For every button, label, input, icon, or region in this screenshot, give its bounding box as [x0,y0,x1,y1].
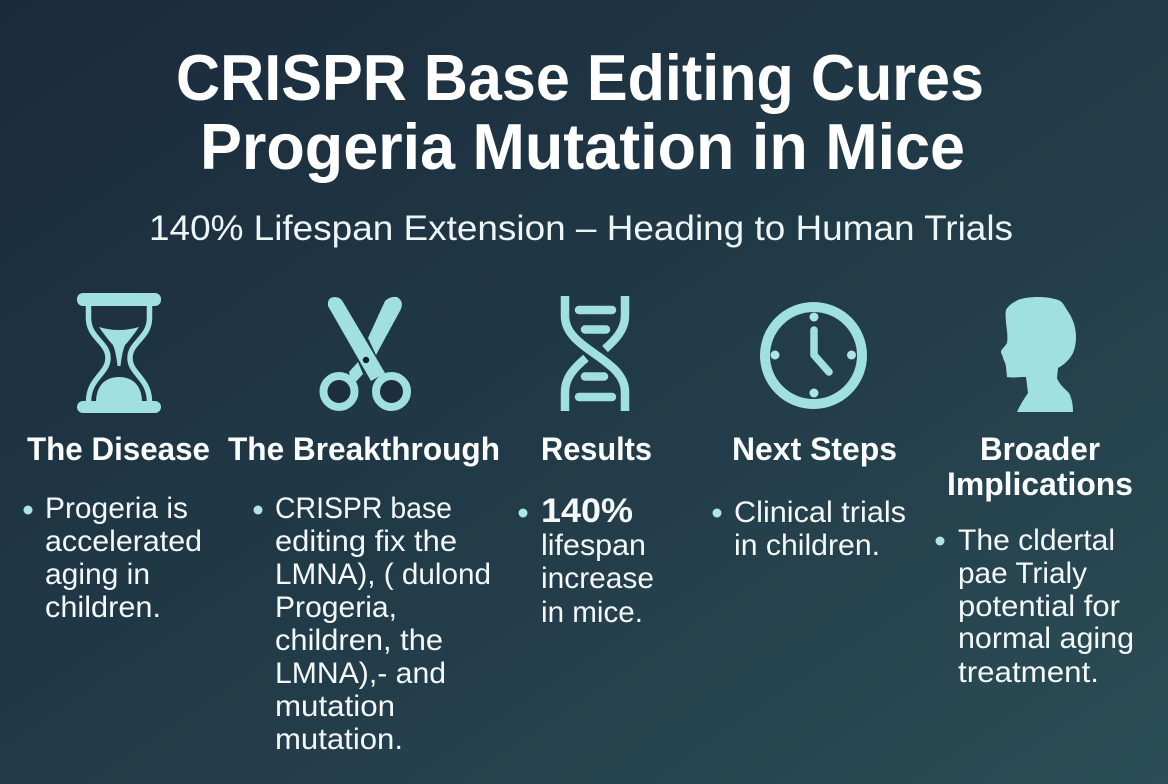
text: results bullet: lifespan [541,529,646,562]
icon: head silhouette [1001,297,1076,412]
heading: the breakthrough: The Breakthrough [228,431,500,467]
text: the breakthrough bullet: CRISPR base [275,492,452,525]
text: broader implications bullet [936,524,1134,689]
text: the breakthrough bullet [254,492,491,756]
heading: the disease: The Disease [27,431,210,467]
subtitle: 140% Lifespan Extension – Heading to Human Trials [149,209,1013,248]
icon: hourglass [77,293,161,413]
icon: dna helix [565,296,625,411]
text: the disease bullet: aging in [45,558,150,591]
text: the disease bullet: children. [45,591,161,624]
text: the breakthrough bullet: children, the [275,624,443,657]
panel: the disease [24,293,210,624]
text: broader implications bullet: The cldertal [958,524,1115,557]
text: the disease bullet: Progeria is [45,492,188,525]
icon: clock [765,307,862,404]
text: broader implications bullet: pae Trialy [958,557,1087,590]
heading: broader implications [947,431,1133,502]
text: next steps bullet: Clinical trials [734,496,906,529]
text: the breakthrough bullet: LMNA),- and [275,657,446,690]
title: Progeria Mutation in Mice [200,110,965,183]
text: the breakthrough bullet: mutation [275,690,395,723]
text: the disease bullet [24,492,202,624]
panel: results [518,296,654,629]
text: next steps bullet: in children. [734,529,880,562]
heading: broader implications: Broader [980,431,1100,467]
text: results bullet: increase [541,562,654,595]
text: broader implications bullet: potential for [958,590,1120,623]
title: CRISPR Base Editing Cures [176,41,984,114]
panel: the breakthrough [228,297,500,756]
text: broader implications bullet: treatment. [958,656,1099,689]
text: results bullet: 140% [541,492,633,530]
text: results bullet [518,492,654,629]
text: broader implications bullet: normal aging [958,622,1134,655]
heading: next steps: Next Steps [732,431,897,467]
title [176,41,984,183]
text: the disease bullet: accelerated [45,525,202,558]
text: results bullet: in mice. [541,596,643,629]
panel: broader implications [936,297,1134,689]
heading: broader implications: Implications [947,466,1133,502]
text: the breakthrough bullet: editing fix the [275,525,457,558]
text: next steps bullet [712,496,906,562]
panel: next steps [712,307,906,562]
icon: scissors [324,297,407,407]
text: the breakthrough bullet: mutation. [275,723,403,756]
text: the breakthrough bullet: LMNA), ( dulond [275,558,491,591]
text: the breakthrough bullet: Progeria, [275,591,397,624]
heading: results: Results [541,431,652,467]
